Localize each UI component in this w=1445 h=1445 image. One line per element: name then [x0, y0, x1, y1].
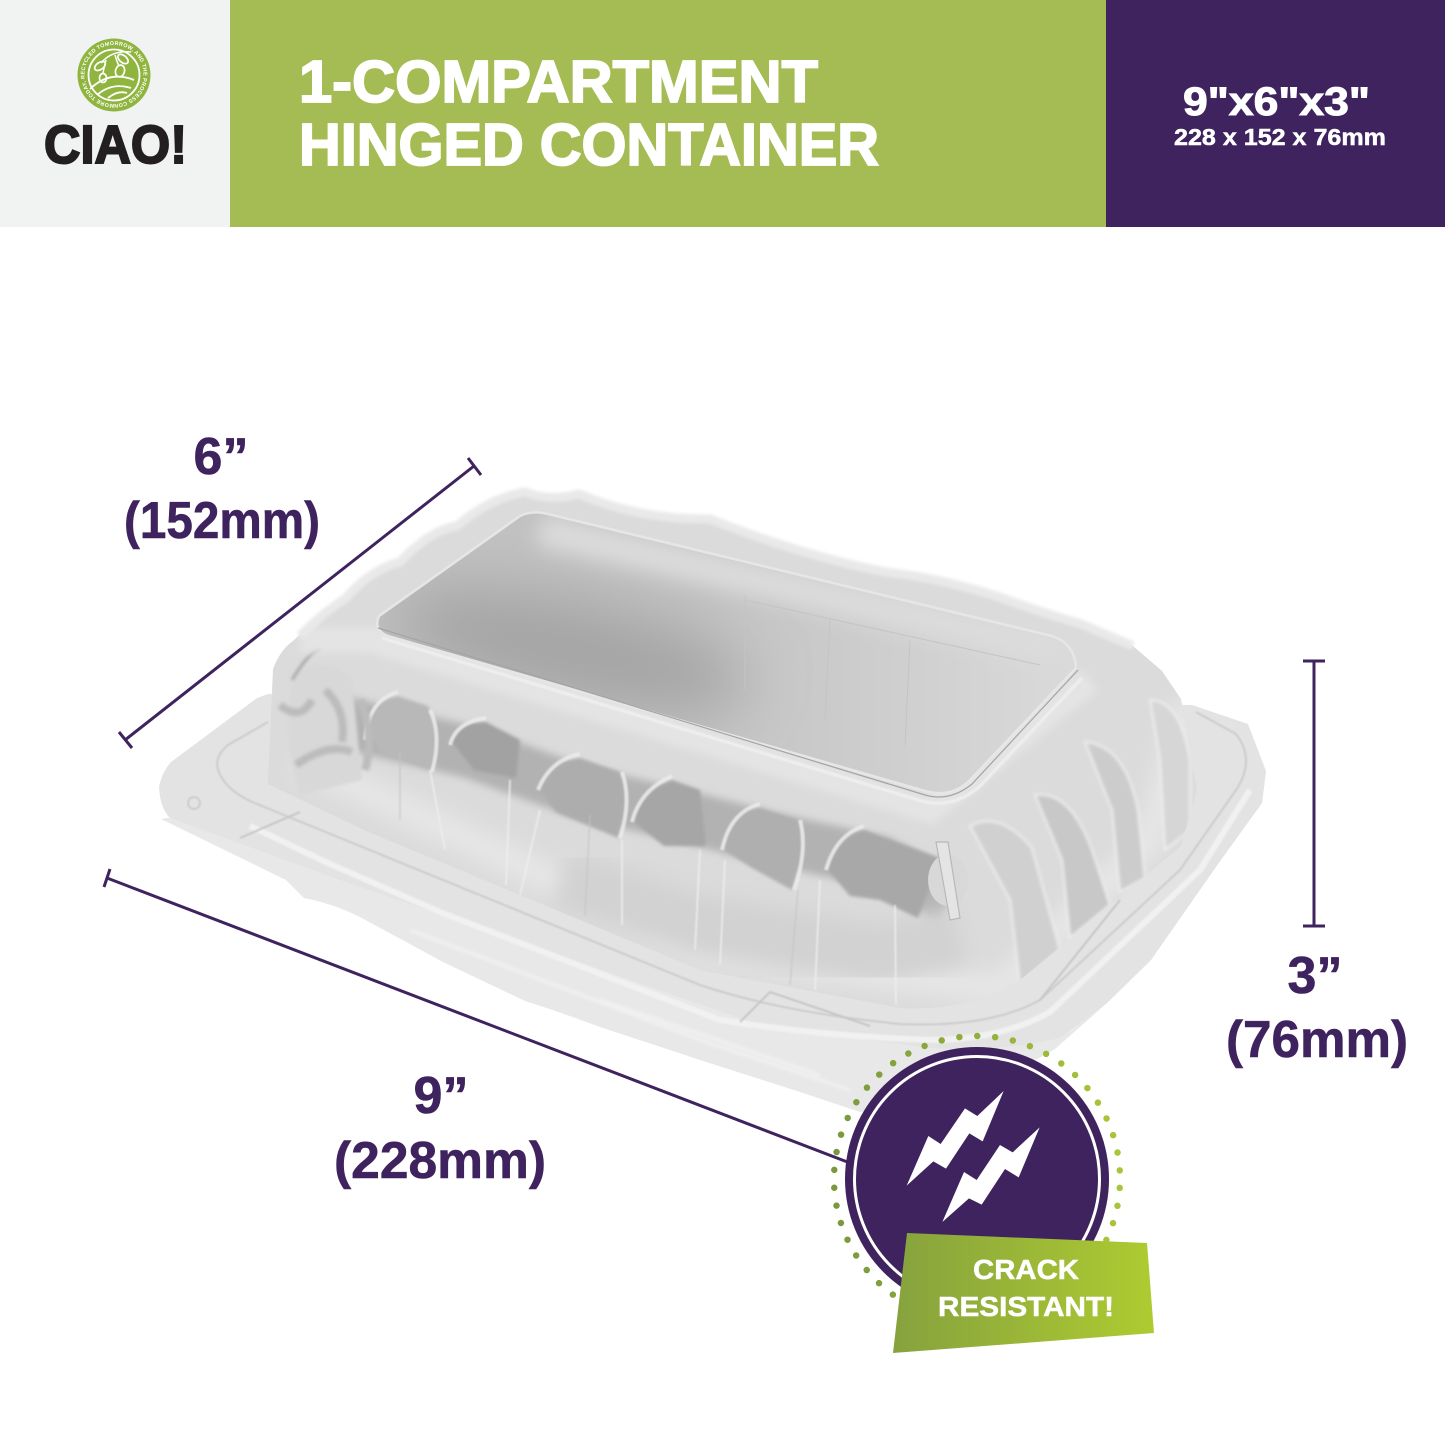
size panel [1106, 0, 1445, 227]
length label: (228mm) [334, 1132, 546, 1190]
dotted ring [834, 1036, 1120, 1322]
flange rim lines [188, 712, 1250, 1040]
title line 2: HINGED CONTAINER [299, 112, 879, 178]
dimension: length 9 inch [104, 869, 850, 1190]
left hammered ribs [280, 648, 369, 795]
lower tray detail [410, 880, 1200, 1090]
height label: 3” [1288, 947, 1342, 1005]
logo panel [0, 0, 230, 227]
length label [334, 1067, 546, 1190]
right corner ribs [970, 700, 1190, 985]
flange [159, 694, 1266, 1049]
scalloped lid edge highlight [300, 492, 1133, 646]
green ribbon [893, 1233, 1154, 1353]
arrow: depth line [119, 458, 481, 748]
header bar [0, 0, 1445, 227]
rib highlights [365, 692, 864, 890]
icon: lightning bolts [907, 1091, 1040, 1222]
product: clear hinged container [159, 492, 1266, 1112]
height label: (76mm) [1226, 1011, 1408, 1069]
height label [1226, 947, 1408, 1069]
depth label [124, 428, 320, 550]
rib blobs [368, 696, 940, 918]
ribbon text: RESISTANT! [938, 1291, 1114, 1322]
depth label: 6” [194, 428, 248, 486]
arrow: length line [104, 869, 850, 1163]
depth label: (152mm) [124, 492, 320, 550]
vertical rib lines [400, 750, 896, 1005]
dimension: depth 6 inch [119, 428, 481, 748]
logo wordmark: CIAO! [44, 115, 187, 175]
title line 1: 1-COMPARTMENT [299, 49, 818, 115]
lower tray [161, 771, 1266, 1112]
size in millimetres: 228 x 152 x 76mm [1174, 124, 1386, 150]
badge: crack resistant [834, 1036, 1154, 1353]
icon: olive seal [78, 38, 150, 112]
dimension: height 3 inch [1226, 661, 1408, 1069]
panel surround highlight [300, 640, 1090, 810]
title panel [230, 0, 1106, 227]
arrow: height line [1303, 661, 1325, 926]
dome shading and rib band [280, 640, 1190, 1005]
ribbon text [938, 1254, 1114, 1322]
purple disc [845, 1047, 1109, 1311]
size in inches: 9"x6"x3" [1183, 80, 1370, 124]
lid top panel [377, 512, 1082, 803]
lid dome [268, 492, 1197, 1009]
corner clip oval [928, 858, 962, 906]
length label: 9” [414, 1067, 468, 1125]
ribbon text: CRACK [973, 1254, 1079, 1285]
